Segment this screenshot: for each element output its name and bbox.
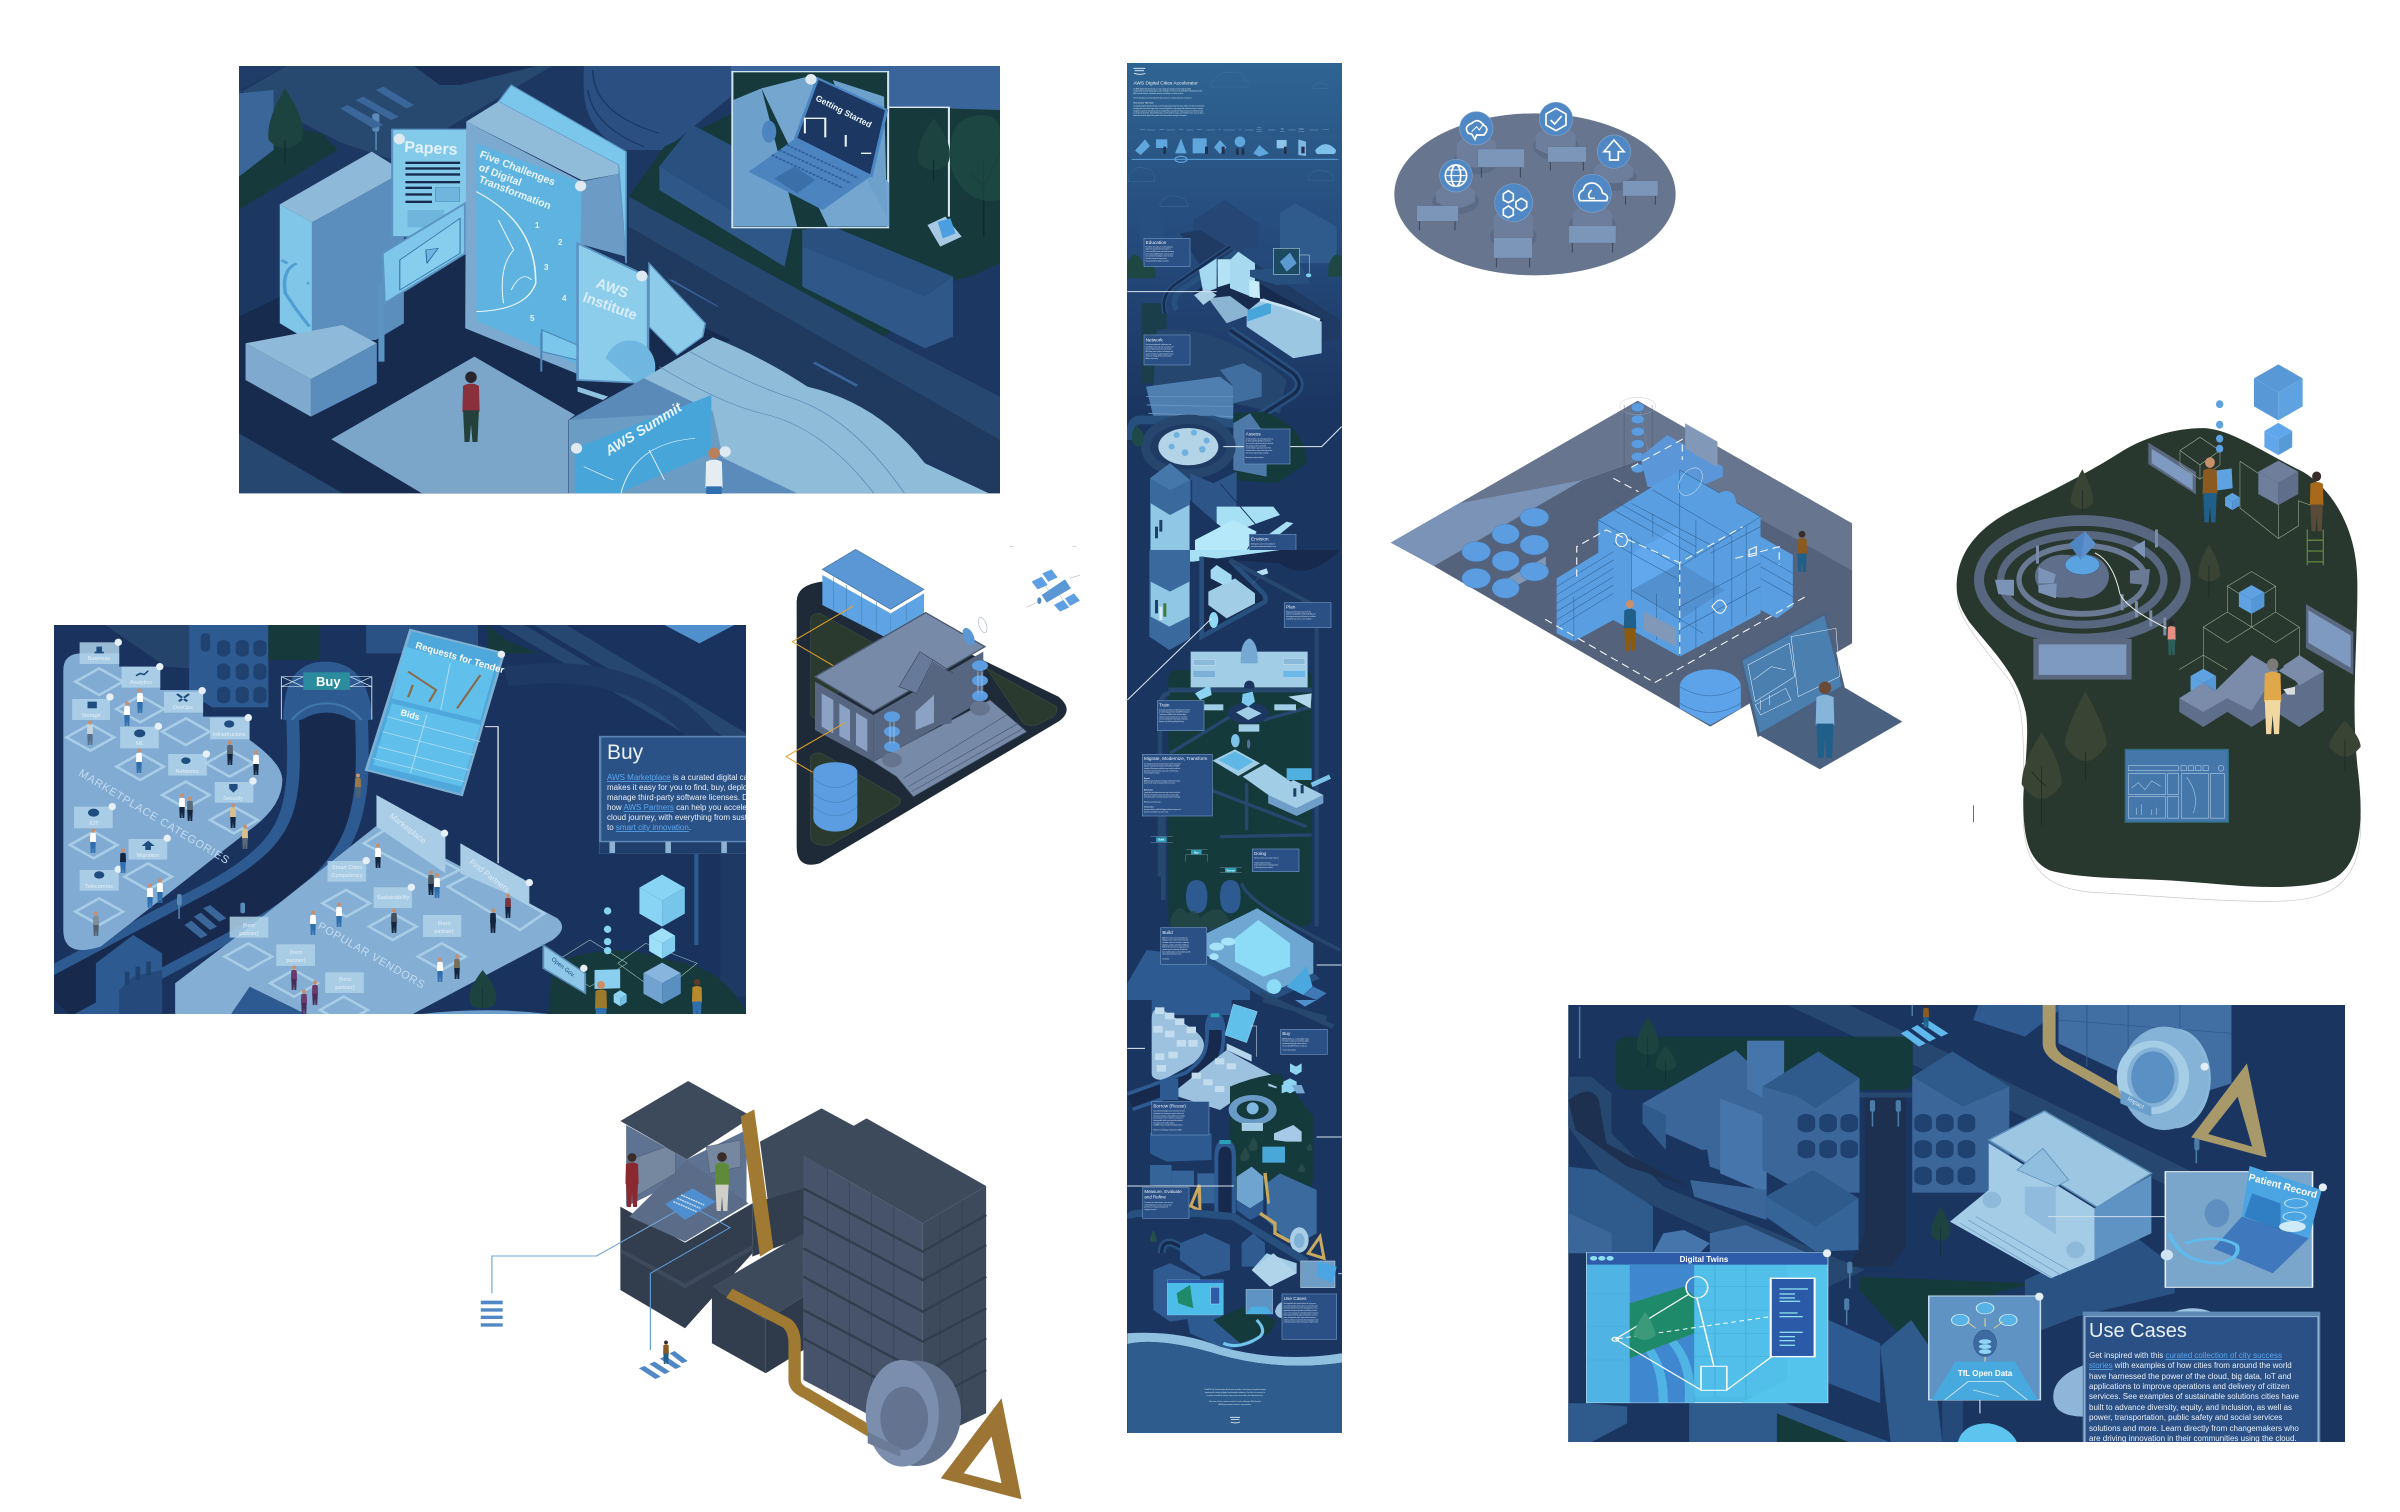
billboard text: Buy: how AWS Partners can help you accelerate your <box>607 803 779 812</box>
map section: header and education to envision: transformation journey, helping cities to solve challenges for citizens and stakeholders. Read about how the <box>1133 90 1202 93</box>
heading: AWS Summit: AWS Summit <box>601 398 686 459</box>
map section: header and education to envision: Network <box>1160 128 1165 131</box>
map section: header and education to envision: stakeholders in your city. Join communities and <box>1146 345 1174 348</box>
map section: plan, train, migrate, build: Build on those to reach new applications and <box>1162 946 1189 949</box>
map section: buy, borrow, measure, use cases and footer: Start now, call our customer contact to reach an Amazon Web Services <box>1209 1400 1261 1403</box>
billboard text: Buy: makes it easy for you to find, buy, deploy and <box>607 783 767 792</box>
map section: plan, train, migrate, build: 3. Reuse open-source solutions <box>1254 866 1273 869</box>
labels: marketplace cards: DevOps <box>173 705 193 711</box>
map section: plan, train, migrate, build: Plan <box>1286 605 1296 610</box>
labels: marketplace cards: Networks <box>176 769 199 775</box>
label: TfL Open Data: TfL Open Data <box>1958 1369 2013 1378</box>
map section: buy, borrow, measure, use cases and footer: and manage third-party software licenses. <box>1282 1042 1308 1045</box>
figures: people in measure building <box>625 1152 729 1364</box>
map section: plan, train, migrate, build: Get started. <box>1162 957 1170 960</box>
labels: marketplace cards: Storage <box>81 713 101 719</box>
labels: marketplace cards: Smart Cities <box>332 865 362 871</box>
labels: marketplace cards: partner) <box>286 958 306 964</box>
labels: marketplace cards: (hero <box>290 950 302 956</box>
map section: plan, train, migrate, build: Migration <box>1144 777 1150 780</box>
label: Impact: Impact <box>2126 1097 2145 1111</box>
map section: header and education to envision: Train <box>1239 129 1242 131</box>
map section: buy, borrow, measure, use cases and footer: Use AWS to share reusable and modular projects. <box>1153 1124 1183 1127</box>
map section: header and education to envision: Borrow <box>1280 131 1284 133</box>
map section: plan, train, migrate, build: Buy <box>1194 852 1199 854</box>
map section: plan, train, migrate, build: Empower city staff through digital learning. <box>1159 720 1185 723</box>
map section: plan, train, migrate, build: data, modern practices and sustainable systems <box>1162 950 1191 953</box>
map section: header and education to envision: Education <box>1146 240 1167 245</box>
billboard text: Use Cases: services. See examples of sustainable solutions cities have <box>2089 1392 2299 1401</box>
label: Open Gov Solutions: Open Gov. <box>550 957 576 979</box>
map section: plan, train, migrate, build: Move onto cloud-native services and reduce technical debt <box>1144 793 1179 796</box>
heading: AWS Institute: AWS <box>594 276 630 302</box>
figure: presenter <box>705 448 723 494</box>
map section: plan, train, migrate, build: Your cloud journey starts to help transform with the cloud, from <box>1144 762 1182 765</box>
panel: assessment platform <box>1394 102 1676 275</box>
map section: plan, train, migrate, build: services for your community. We build with <box>1162 948 1188 951</box>
map section: header and education to envision: Working with a vision is the foundation of <box>1251 543 1276 546</box>
map section: plan, train, migrate, build: foundation services for serverless, containers, <box>1162 941 1190 944</box>
map section: plan, train, migrate, build: systems to the cloud, increasing resilience and scale. <box>1144 782 1176 785</box>
map section: header and education to envision: To understand the scale of the opportunity, use <box>1246 437 1273 440</box>
map section: header and education to envision: and Refine <box>1298 131 1305 133</box>
map section: buy, borrow, measure, use cases and footer: AWS Marketplace is a curated digital catalog <box>1282 1037 1309 1040</box>
heading: Five Challenges of Digital Transformation: Transformation <box>477 174 553 212</box>
list numbers: 3 <box>544 263 549 272</box>
figure: person on crossing <box>1923 1004 1929 1028</box>
map section: header and education to envision: Transform <box>1256 130 1262 132</box>
map section: buy, borrow, measure, use cases and footer: Buy <box>1282 1031 1291 1036</box>
panel: buy detail <box>54 625 782 1030</box>
map section: header and education to envision: Envision <box>1251 537 1269 542</box>
map section: buy, borrow, measure, use cases and footer: that makes it easy for you to find, buy, deploy <box>1282 1040 1309 1043</box>
figures: builders <box>1624 531 1834 758</box>
map section: buy, borrow, measure, use cases and footer: Cities with limited budgets seek to minimize risk when <box>1153 1110 1185 1113</box>
map section: plan, train, migrate, build: and accelerate delivery for cities. <box>1162 953 1182 956</box>
map section: plan, train, migrate, build: building a smart, connected community. Use <box>1162 939 1189 942</box>
heading: AWS Institute: Institute <box>581 290 639 324</box>
map section: buy, borrow, measure, use cases and footer: stories with examples of how cities from around the world <box>1284 1304 1318 1307</box>
map section: header and education to envision: To enjoy this Digital Cities Accelerator, move through progressively from top to bottom. Use the interactive links <box>1133 105 1205 108</box>
map section: header and education to envision: You can create a benchmark of your cloud and <box>1246 442 1273 445</box>
map section: header and education to envision: that other cities took in their journey. <box>1146 257 1168 260</box>
map section: header and education to envision: have solved real challenges and see the steps <box>1146 255 1173 258</box>
map section: buy, borrow, measure, use cases and footer: open-source solutions, code, and data are accessible <box>1153 1114 1185 1117</box>
figure: woman with phone <box>462 371 480 442</box>
heading: Papers: Papers <box>404 139 458 159</box>
card: Requests for Tender: Requests for Tender <box>414 640 506 676</box>
map section: header and education to envision: events, the AWS Institute and hands-on training. <box>1146 250 1175 253</box>
card: Requests for Tender: Bids <box>399 707 421 722</box>
labels: marketplace cards: (hero <box>339 977 351 983</box>
panel: tall city map <box>1127 63 1342 1433</box>
map section: buy, borrow, measure, use cases and footer: strategies for impact. <box>1144 1208 1157 1211</box>
map section: header and education to envision: successful transformation initiatives. Learn <box>1251 545 1276 548</box>
map section: header and education to envision: Education <box>1140 128 1146 131</box>
map section: buy, borrow, measure, use cases and footer: Use Cases <box>1284 1296 1307 1301</box>
map section: header and education to envision: become regular partners with a city network. <box>1146 348 1172 351</box>
map section: header and education to envision: The AWS Digital Cities Accelerator is a tool to guide you and your team through the digital <box>1133 87 1192 90</box>
map section: header and education to envision: partners to design and adapt strategies for your <box>1146 352 1174 355</box>
map section: header and education to envision: Assess your current readiness. <box>1246 456 1265 459</box>
billboard text: Use Cases: are driving innovation in their communities using the cloud. <box>2089 1434 2297 1443</box>
map section: plan, train, migrate, build: proactive and adaptable cloud planning. Align your <box>1286 613 1316 616</box>
map section: header and education to envision: Envision <box>1197 129 1202 131</box>
labels: marketplace cards: Analytics <box>130 680 152 686</box>
heading: Five Challenges of Digital Transformation: Five Challenges <box>478 149 557 189</box>
map section: plan, train, migrate, build: workforce across municipal services. Your team <box>1159 715 1188 718</box>
map section: header and education to envision: Network <box>1146 337 1163 342</box>
map section: plan, train, migrate, build: migration to operational excellence and building on the AWS <box>1144 765 1180 768</box>
map section: buy, borrow, measure, use cases and footer: applications to improve operations and delivery of citizen <box>1284 1309 1317 1312</box>
labels: marketplace cards: Telecomms <box>85 884 113 890</box>
map section: plan, train, migrate, build: Modernization <box>1144 789 1153 792</box>
map section: header and education to envision <box>1127 68 1342 554</box>
map section: header and education to envision: Modernize, <box>1256 128 1263 130</box>
panel: green park with cube builders <box>1957 364 2361 901</box>
map section: plan, train, migrate, build: Transformation <box>1144 806 1154 809</box>
list numbers <box>530 221 567 323</box>
billboard text: Buy <box>607 744 746 832</box>
map section: buy, borrow, measure, use cases and footer: built to advance diversity, equity, and inclusion, as well as <box>1284 1314 1318 1317</box>
labels: marketplace cards: Security <box>223 796 243 802</box>
map section: header and education to envision: throughout the map. Each stage shows a visual metaphor for a key activity, with related resources in context. <box>1133 107 1204 110</box>
map section: buy, borrow, measure, use cases and footer: solutions and more. Learn directly from changemakers who <box>1284 1318 1319 1321</box>
labels: marketplace cards: (hero <box>438 921 450 927</box>
map section: plan, train, migrate, build: Start here for proven patterns and a path to modernization. <box>1144 769 1179 772</box>
map section: header and education to envision: Start by participating with collaborators and <box>1146 343 1171 346</box>
map section: header and education to envision: outcomes and use cases across city services. <box>1246 449 1273 452</box>
billboard text: Buy: cloud journey, with everything from sustainability <box>607 813 778 822</box>
list numbers: 5 <box>530 314 535 323</box>
map section: plan, train, migrate, build: Innovate with data and AI. Build digital solutions that span each <box>1144 808 1181 811</box>
map section: buy, borrow, measure, use cases and footer: The AWS City Transformation Accelerator provides a mechanism for quickly shaping, <box>1204 1388 1267 1391</box>
map section: plan, train, migrate, build: Increasing cloud skills and talent fluency is essential <box>1159 708 1190 711</box>
map section: header and education to envision: How to Use This Tool <box>1133 101 1154 104</box>
map section: header and education to envision: Take the next step through a workshop. <box>1246 451 1269 454</box>
map section: header and education to envision: Read about how the digital cities project starts and continues through to the impact. <box>1133 114 1187 117</box>
map section: buy, borrow, measure, use cases and footer: to smart city innovation. <box>1282 1049 1297 1052</box>
labels: marketplace cards: IOT <box>89 821 99 827</box>
billboard text: Buy: AWS Marketplace is a curated digital catalog that <box>607 773 782 782</box>
map section: header and education to envision: Get started with the guidance and tools. <box>1146 259 1170 262</box>
label: Patient Record: Patient Record <box>2247 1172 2318 1201</box>
map section: buy, borrow, measure, use cases and footer: and a wide set of reusable solutions. <box>1153 1121 1175 1124</box>
label: Find Partners banner: Find Partners <box>468 857 511 894</box>
map section: buy, borrow, measure, use cases and footer: power, transportation, public safety and social services <box>1284 1316 1316 1319</box>
billboard text: Use Cases: stories with examples of how cities from around the world <box>2089 1361 2292 1370</box>
billboard text: Use Cases: built to advance diversity, equity, and inclusion, as well as <box>2089 1403 2292 1412</box>
map section: header and education to envision: digital cities transformation, from papers to <box>1146 248 1171 251</box>
map section: plan, train, migrate, build: and improve public services by moving to modern technology. <box>1144 796 1181 799</box>
map section: header and education to envision: AWS Digital Cities Accelerator <box>1133 81 1198 87</box>
heading: MARKETPLACE CATEGORIES: MARKETPLACE CATEGORIES <box>76 767 232 867</box>
map section: buy, borrow, measure, use cases and footer: and Refine <box>1144 1195 1167 1200</box>
map section: header and education to envision: Assess <box>1179 128 1183 131</box>
map section: buy, borrow, measure, use cases and footer: and accelerate the time to value for a city. Discover <box>1153 1117 1184 1120</box>
heading: Five Challenges of Digital Transformation <box>479 150 555 210</box>
map section: header and education to envision: Attend a city meetup. <box>1146 357 1159 360</box>
map section: plan, train, migrate, build: can learn to build skills and develop certifications. <box>1159 718 1189 721</box>
map section: plan, train, migrate, build: Certification and AWS re/Start to build a digital <box>1159 713 1187 716</box>
map section: header and education to envision: Learn about the AWS Summit, see how leaders <box>1146 252 1174 255</box>
panel: education detail <box>239 66 1000 518</box>
map section: header and education to envision: Evaluate <box>1299 128 1304 131</box>
map section: plan, train, migrate, build <box>1127 550 1342 1002</box>
card: Requests for Tender <box>399 640 506 722</box>
map section: header and education to envision: Measure <box>1299 127 1304 129</box>
map section: buy, borrow, measure, use cases and footer: Borrow (Reuse) <box>1153 1103 1186 1108</box>
panel: triangle plot with building and satellite <box>786 547 1080 865</box>
map section: plan, train, migrate, build: databases, analytics and artificial intelligence. <box>1162 943 1190 946</box>
map section: header and education to envision: recommendations against your vision. Find <box>1246 447 1271 450</box>
map section: plan, train, migrate, build: Transformation lies ahead. <box>1144 772 1160 775</box>
map section: plan, train, migrate, build: Train <box>1159 703 1170 708</box>
map section: buy, borrow, measure, use cases and footer: investing in new. Open-source projects and reuse of <box>1153 1112 1185 1115</box>
list numbers: 2 <box>558 238 563 247</box>
map section: plan, train, migrate, build: 1. Build solutions themselves <box>1254 861 1271 864</box>
labels: marketplace cards: Competency <box>332 873 363 879</box>
labels: marketplace cards: partner) <box>335 985 355 991</box>
map section: buy, borrow, measure, use cases and footer: To measure the continued value of your city, your <box>1144 1201 1174 1204</box>
map section: buy, borrow, measure, use cases and footer: (AWS) government, business representative. <box>1219 1403 1252 1406</box>
map section: buy, borrow, measure, use cases and footer: sustainability metrics, and use cases, you and <box>1144 1203 1172 1206</box>
map section: buy, borrow, measure, use cases and footer: have harnessed the power of the cloud, big data, IoT and <box>1284 1307 1317 1310</box>
map section: plan, train, migrate, build: AWS helps you quickly move workloads and data from legacy <box>1144 779 1181 782</box>
map section: buy, borrow, measure, use cases and footer: sharing models, public sector open data initiatives <box>1153 1119 1183 1122</box>
map section: header and education to envision: Navigate to a point on the journey map, for example Plan, and open the linked resources to understand what <box>1133 109 1204 112</box>
billboard text: Use Cases: Get inspired with this curated collection of city success <box>2089 1351 2282 1360</box>
billboard text: Use Cases: solutions and more. Learn directly from changemakers who <box>2089 1424 2299 1433</box>
map section: header and education to envision: ambition in strategy, delivery and innovation. <box>1146 355 1172 358</box>
map section: plan, train, migrate, build: technology strategy and cloud center of excellence <box>1286 615 1316 618</box>
billboard text: Buy: Buy <box>607 741 644 764</box>
map section: buy, borrow, measure, use cases and footer: Find more in the Registry of Open Data on AWS. <box>1153 1128 1183 1131</box>
heading: AWS Institute <box>583 279 636 320</box>
list numbers: 4 <box>562 294 567 303</box>
label: Digital Twins window: Digital Twins <box>1680 1255 1729 1264</box>
billboard text: Use Cases: power, transportation, public safety and social services <box>2089 1413 2282 1422</box>
map section: plan, train, migrate, build: 2. Buy solutions from technology partners <box>1254 864 1279 867</box>
map section: plan, train, migrate, build: Migrate, Modernize, Transform <box>1144 756 1208 761</box>
map section: buy, borrow, measure, use cases and footer: growing and scaling city digital transformation initiatives. Use this as a resource to <box>1205 1391 1265 1394</box>
map section: plan, train, migrate, build: to transforming government. Use AWS Training and <box>1159 711 1190 714</box>
labels: marketplace cards: Migration <box>137 853 159 859</box>
map section: plan, train, migrate, build: Modernize your legacy apps. <box>1144 800 1162 803</box>
billboard text: Use Cases: Use Cases <box>2089 1320 2187 1342</box>
heading: Five Challenges of Digital Transformation: of Digital <box>477 162 523 189</box>
map section: plan, train, migrate, build: Build <box>1158 840 1165 842</box>
billboard text: Use Cases <box>2089 1320 2299 1443</box>
map section: plan, train, migrate, build: Borrow <box>1227 870 1235 872</box>
billboard text: Buy: manage third-party software licenses. Discover <box>607 793 774 802</box>
map section: plan, train, migrate, build: Legacy data and infrastructure make your cities less effective. <box>1144 791 1181 794</box>
map section: header and education to envision: data readiness and find actionable <box>1246 444 1266 447</box>
panel: measure building with ruler and tape <box>481 1081 1022 1499</box>
map section: header and education to envision: Buy <box>1281 129 1284 131</box>
map section: plan, train, migrate, build: AWS offers wide services and solutions for <box>1162 936 1188 939</box>
map section: header and education to envision: Build <box>1281 127 1284 129</box>
map section: header and education to envision: AWS cloud accelerates sustainable outcomes and delivers on citizen services. <box>1133 92 1184 95</box>
figures: people on the buy plazas <box>87 688 702 1030</box>
map section: plan, train, migrate, build: Cities have three ways to begin. They can: <box>1254 857 1280 860</box>
panel: use cases detail <box>1568 1004 2346 1443</box>
map section: buy, borrow, measure, use cases and footer: Get inspired with this curated collection of city success <box>1284 1302 1316 1305</box>
map section: plan, train, migrate, build: Bring your transformation vision to life with <box>1286 610 1311 613</box>
map section: header and education to envision: AWS helps connect leaders, technologists and <box>1146 350 1173 353</box>
map section: header and education to envision: to consider and prioritize. Start with Education, work through the stages, and continue to Use Cases for ideas. <box>1133 112 1204 115</box>
billboard text: Buy: to smart city innovation. <box>607 823 691 832</box>
labels: marketplace cards: Sustainability <box>377 895 409 901</box>
map section: buy, borrow, measure, use cases and footer: Discover how AWS Partners can help you. <box>1282 1044 1308 1047</box>
map section: plan, train, migrate, build: foundation. Moving your workloads saves resources and time. <box>1144 767 1181 770</box>
map section: header and education to envision: Use Cases <box>1323 129 1329 131</box>
list numbers: 1 <box>535 221 540 230</box>
map section: plan, train, migrate, build: department and deliver new citizen value. <box>1144 810 1169 813</box>
map section: plan, train, migrate, build: Build <box>1162 930 1173 935</box>
map section: buy, borrow, measure, use cases and footer: your team can measure and improve the <box>1144 1206 1168 1209</box>
map section: buy, borrow, measure, use cases and footer <box>1127 993 1342 1433</box>
map section: header and education to envision: Use this illustration to see the high-level steps and access curated collections of resources. <box>1133 96 1192 99</box>
map section: header and education to envision: Migrate, <box>1257 125 1262 128</box>
map background <box>1127 63 1342 413</box>
map section: buy, borrow, measure, use cases and footer: innovate on behalf of citizens using secure, accessible, cloud based services. <box>1207 1394 1264 1397</box>
map section: buy, borrow, measure, use cases and footer: Measure, Evaluate <box>1144 1189 1182 1194</box>
heading: Getting Started: Getting Started <box>814 93 873 130</box>
map section: header and education to envision: Assess <box>1246 431 1261 436</box>
sign: Buy gate: Buy <box>316 674 341 689</box>
billboard text: Use Cases: have harnessed the power of the cloud, big data, IoT and <box>2089 1372 2291 1381</box>
map section: plan, train, migrate, build: and prioritize use cases in a clear roadmap. <box>1286 617 1312 620</box>
billboard text: Use Cases: applications to improve operations and delivery of citizen <box>2089 1382 2290 1391</box>
map section: header and education to envision: Plan <box>1218 129 1221 131</box>
labels: marketplace cards: Business <box>88 656 110 662</box>
map section: buy, borrow, measure, use cases and footer: are driving innovation in their communities using the cloud. <box>1284 1321 1319 1324</box>
labels: marketplace cards: partner) <box>434 929 454 935</box>
labels: marketplace cards: (hero <box>243 923 255 929</box>
map section: header and education to envision: Find all the information you need to guide your <box>1146 245 1174 248</box>
map section: plan, train, migrate, build: Doing <box>1254 851 1267 856</box>
labels: marketplace cards <box>81 656 454 991</box>
panel: build site with blocks <box>1391 397 1902 769</box>
labels: marketplace cards: partner) <box>239 931 259 937</box>
label: Marketplace banner: Marketplace <box>388 811 428 846</box>
labels: marketplace cards: ML <box>136 741 144 747</box>
heading: POPULAR VENDORS: POPULAR VENDORS <box>316 920 427 992</box>
map section: buy, borrow, measure, use cases and footer: services. See examples of sustainable solutions cities have <box>1284 1311 1319 1314</box>
labels: marketplace cards: Infrastructure <box>213 732 245 738</box>
map section: header and education to envision: the Smart City Maturity Model assessment. <box>1246 440 1272 443</box>
